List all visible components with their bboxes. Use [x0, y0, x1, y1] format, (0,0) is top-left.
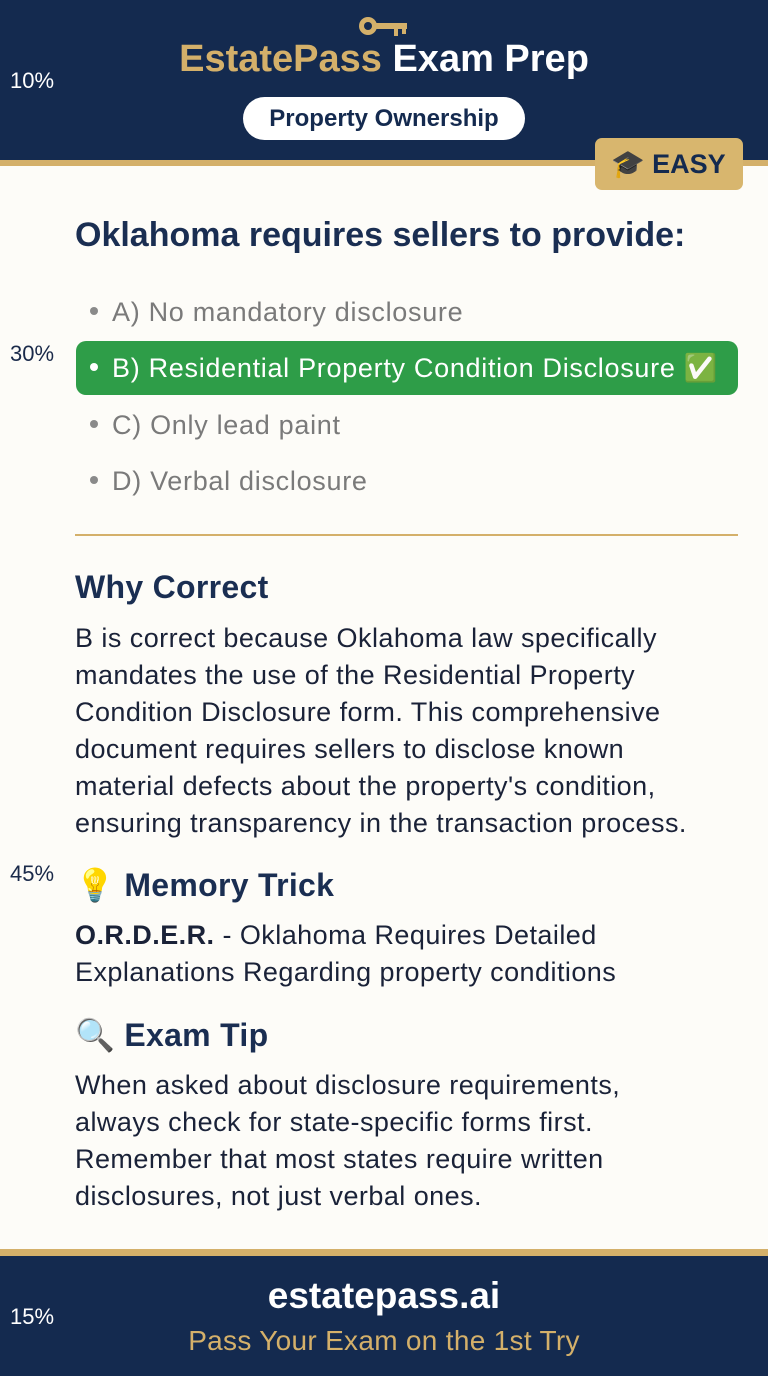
footer band — [0, 1256, 768, 1376]
difficulty badge — [595, 138, 743, 190]
option B correct: B) Residential Property Condition Disclosure ✅ — [112, 353, 718, 383]
option C: C) Only lead paint — [112, 410, 341, 440]
explanation text: material defects about the property's condition, — [75, 771, 656, 801]
exam tip text: always check for state-specific forms first. — [75, 1107, 593, 1137]
footer tagline: Pass Your Exam on the 1st Try — [188, 1325, 580, 1356]
percent label: 15% — [10, 1304, 54, 1329]
title: EstatePass Exam Prep — [179, 38, 589, 80]
memory text: O.R.D.E.R. - Oklahoma Requires Detailed — [75, 920, 597, 950]
explanation text: ensuring transparency in the transaction process. — [75, 808, 687, 838]
difficulty badge: 🎓 EASY — [611, 149, 726, 179]
percent label: 45% — [10, 861, 54, 886]
heading: memory trick: 💡 Memory Trick — [75, 867, 334, 903]
memory text: Explanations Regarding property conditions — [75, 957, 616, 987]
options list — [76, 297, 738, 496]
option A: A) No mandatory disclosure — [112, 297, 463, 327]
explanation text: mandates the use of the Residential Property — [75, 660, 635, 690]
memory text — [75, 920, 616, 987]
heading: why correct: Why Correct — [75, 569, 269, 605]
exam tip text: disclosures, not just verbal ones. — [75, 1181, 482, 1211]
explanation text: document requires sellers to disclose known — [75, 734, 624, 764]
option D: D) Verbal disclosure — [112, 466, 368, 496]
heading: exam tip: 🔍 Exam Tip — [75, 1017, 268, 1053]
option B correct — [76, 341, 738, 395]
explanation text: Condition Disclosure form. This comprehensive — [75, 697, 660, 727]
exam tip text: When asked about disclosure requirements, — [75, 1070, 620, 1100]
explanation text: B is correct because Oklahoma law specifically — [75, 623, 657, 653]
exam tip text — [75, 1070, 620, 1211]
footer url: estatepass.ai — [268, 1275, 500, 1316]
category pill: Property Ownership — [269, 105, 499, 132]
percent label: 30% — [10, 341, 54, 366]
icon: key — [359, 17, 407, 36]
exam tip text: Remember that most states require written — [75, 1144, 604, 1174]
explanation text — [75, 623, 687, 838]
question heading: Oklahoma requires sellers to provide: — [75, 216, 685, 254]
header band — [0, 0, 768, 160]
category pill — [243, 97, 525, 140]
percent label: 10% — [10, 68, 54, 93]
